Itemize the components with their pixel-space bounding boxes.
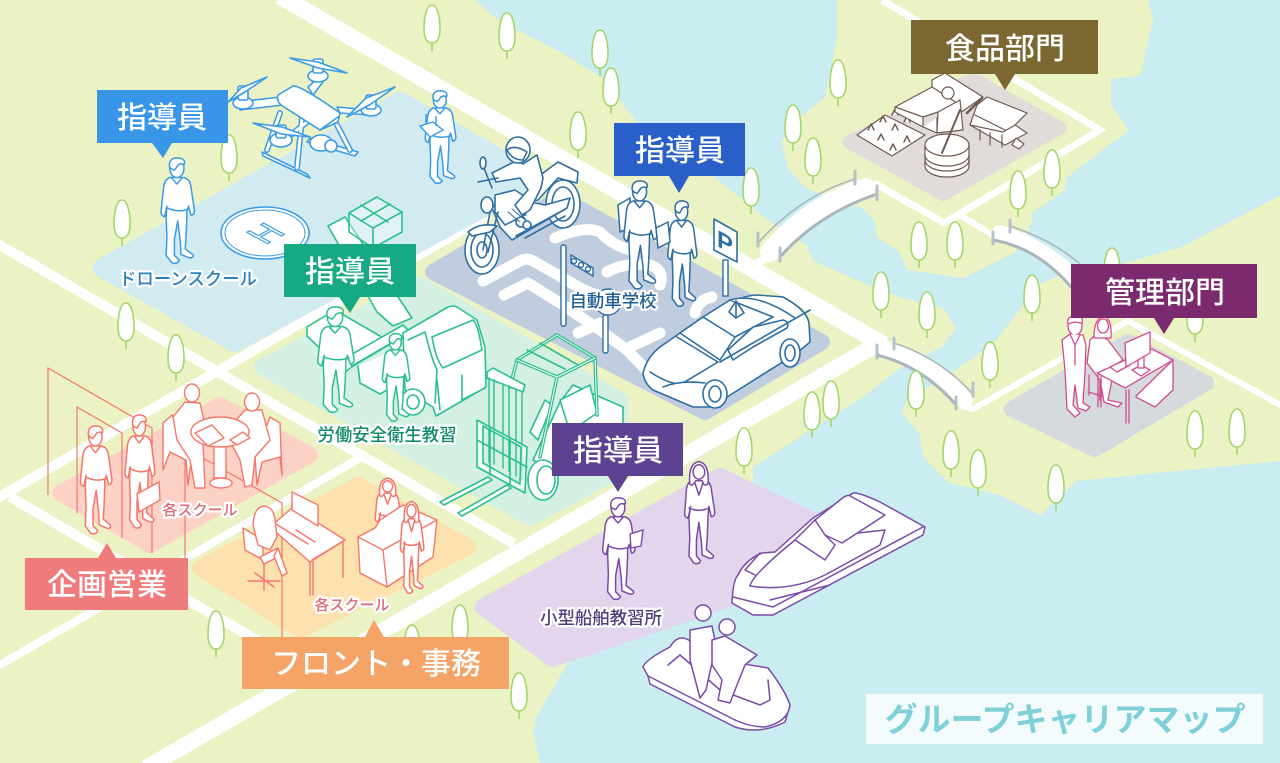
- pad: sales: [60, 405, 310, 545]
- caption: schools (front): 各スクール: [314, 596, 390, 614]
- illustration: sales area frames: [48, 368, 287, 640]
- illustration: two visitors: [80, 415, 160, 534]
- illustration: food production: [857, 73, 1027, 177]
- helipad: [221, 207, 309, 259]
- illustration: car: [643, 295, 810, 408]
- pad: food division: [848, 78, 1061, 195]
- pad: drone school: [103, 102, 515, 342]
- label: front office: フロント・事務: [271, 648, 481, 681]
- illustration: workers: [318, 307, 410, 421]
- illustration: jet ski: [643, 605, 790, 730]
- illustration: reception counter: [358, 478, 437, 593]
- label: food division: 食品部門: [945, 33, 1065, 66]
- caption: driving school: 自動車学校: [570, 291, 656, 311]
- label: sales planning: 企画営業: [47, 569, 167, 602]
- illustration: motorcycle: [465, 137, 580, 274]
- caption: boat school: 小型船舶教習所: [540, 608, 662, 628]
- pad: boat school: [484, 477, 810, 658]
- label: boat instructor: [552, 423, 683, 492]
- caption: safety training: 労働安全衛生教習: [317, 425, 457, 445]
- label: food division: [911, 20, 1098, 90]
- label: drone instructor: [97, 90, 228, 158]
- illustration: boat instructors: [603, 462, 715, 599]
- label: safety instructor: 指導員: [305, 256, 395, 289]
- label: boat instructor: 指導員: [573, 435, 663, 468]
- label: admin division: 管理部門: [1105, 277, 1225, 310]
- label: admin division: [1071, 264, 1257, 334]
- bridges: [758, 171, 1079, 409]
- title: グループキャリアマップ: [884, 701, 1246, 738]
- illustration: office desk: [243, 492, 345, 595]
- illustration: parking sign: P: [717, 225, 733, 260]
- label: driving instructor: [614, 123, 745, 193]
- label: safety instructor: [284, 244, 416, 313]
- helipad: H: [239, 219, 294, 249]
- illustration: forklift: [440, 335, 623, 516]
- label: driving instructor: 指導員: [635, 135, 725, 168]
- caption: schools (sales): 各スクール: [162, 501, 238, 519]
- pad: safety training: [262, 285, 620, 518]
- illustration: admin office: [1087, 317, 1173, 423]
- label: front office: [242, 620, 509, 689]
- pad: driving school: [433, 198, 822, 412]
- illustration: traffic signals: [561, 245, 621, 353]
- pad: admin division: [1012, 342, 1206, 449]
- illustration: parking sign: [714, 219, 737, 296]
- illustration: aerial lift truck: [307, 197, 486, 416]
- illustration: drone controller man: [420, 91, 456, 183]
- pad: front office: [200, 485, 468, 630]
- illustration: instructor man: [161, 158, 194, 263]
- illustration: motor boat: [732, 493, 925, 615]
- title: [866, 694, 1263, 744]
- illustration: students: [618, 181, 697, 306]
- illustration: admin man: [1062, 316, 1090, 417]
- pad: road markings: [483, 230, 712, 377]
- caption: drone school: ドローンスクール: [119, 269, 257, 289]
- illustration: drone: [228, 58, 395, 178]
- label: drone instructor: 指導員: [117, 102, 207, 135]
- illustration: meeting group: [163, 384, 282, 488]
- label: sales planning: [25, 543, 188, 610]
